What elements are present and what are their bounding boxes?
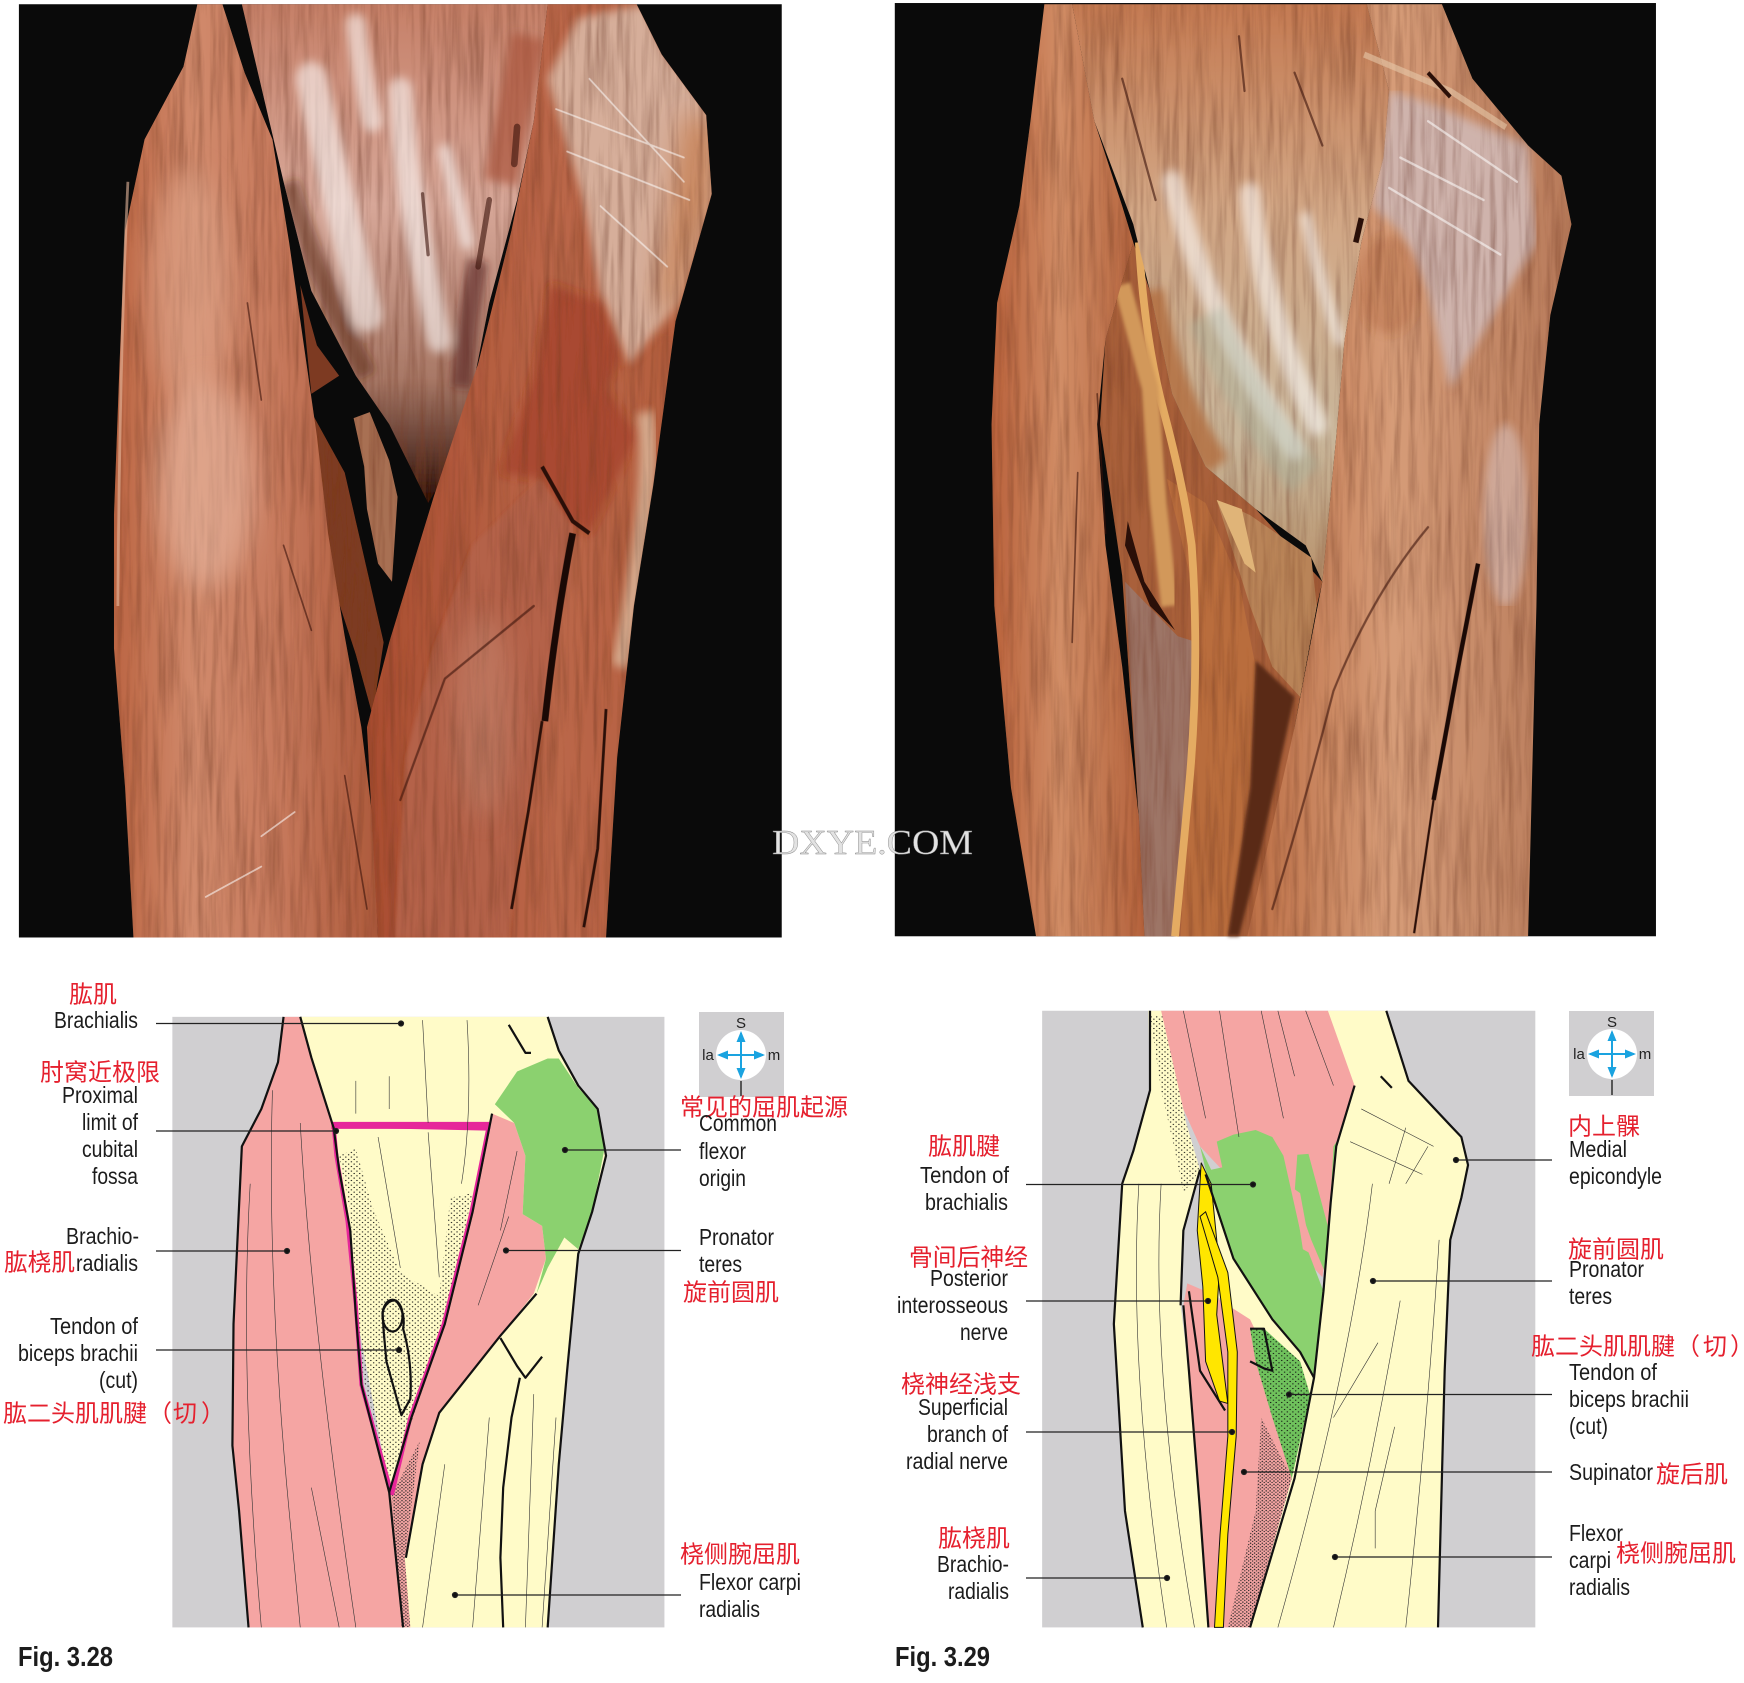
label: common flexor origin	[680, 1094, 848, 1191]
figure caption 3.29: Fig. 3.29	[895, 1641, 990, 1672]
label: flexor carpi radialis: radialis	[1569, 1574, 1630, 1600]
lateral light band	[620, 412, 648, 667]
muscle shade below tendon	[1358, 236, 1420, 333]
fibre lines	[1136, 1011, 1439, 1627]
label: medial epicondyle: epicondyle	[1569, 1163, 1662, 1189]
cream flexor mass	[1250, 1011, 1468, 1627]
yellow posterior interosseous nerve	[1197, 1163, 1228, 1403]
photo: Fig. 3.28 dissection	[19, 4, 782, 937]
compass: Fig. 3.28: m	[768, 1047, 780, 1064]
label: tendon of brachialis: brachialis	[925, 1189, 1008, 1215]
compass: Fig. 3.28: la	[702, 1047, 714, 1064]
pink slit	[1293, 1188, 1311, 1254]
label: brachialis	[54, 982, 138, 1033]
muscle: flexor carpi radialis	[395, 479, 573, 937]
label: pronator teres: Pronator	[1569, 1256, 1644, 1282]
label: common flexor origin: Common	[699, 1110, 777, 1136]
soft overlays clipped to flexor mass	[395, 4, 717, 937]
muscle: forearm fascia piece	[1125, 582, 1197, 936]
label: medial epicondyle: 内上髁	[1568, 1114, 1640, 1140]
label: posterior interosseous nerve: 骨间后神经	[909, 1244, 1028, 1272]
compass: Fig. 3.29	[1569, 1011, 1654, 1096]
label: tendon of brachialis: 肱肌腱	[928, 1134, 1000, 1160]
soft overlays clipped to flexor mass	[1358, 91, 1536, 606]
label: tendon of biceps brachii: （	[1676, 1334, 1700, 1360]
tendon: common flexor origin	[1372, 91, 1536, 388]
photo: Fig. 3.29 dissection	[895, 3, 1656, 936]
outlines	[1114, 1011, 1468, 1627]
label: tendon of biceps brachii: (cut)	[99, 1367, 138, 1393]
label: flexor carpi radialis: 桡侧腕屈肌	[680, 1542, 800, 1568]
muscle: supinator	[1167, 479, 1256, 936]
biceps tendon oval tip	[383, 1300, 403, 1331]
label: brachioradialis	[937, 1526, 1010, 1604]
label: medial epicondyle: Medial	[1569, 1136, 1627, 1162]
cream brachioradialis	[1114, 1011, 1208, 1627]
label: superficial branch of radial nerve	[901, 1372, 1021, 1474]
label: superficial branch of radial nerve: Superficial	[918, 1394, 1008, 1420]
label: pronator teres: teres	[699, 1251, 742, 1277]
muscle: common flexor mass and forearm flexors	[367, 4, 712, 937]
label: pronator teres: Pronator	[699, 1224, 774, 1250]
labels: Fig. 3.28 right column	[680, 1094, 848, 1622]
stippling	[339, 1149, 473, 1478]
outlines	[232, 1017, 606, 1627]
leader lines: Fig. 3.29	[1026, 1158, 1552, 1580]
highlights on brachioradialis	[118, 170, 367, 909]
label: tendon of biceps brachii: (cut)	[1569, 1413, 1608, 1439]
label: flexor carpi radialis	[1569, 1520, 1736, 1600]
label: tendon of biceps brachii: Tendon of	[50, 1313, 139, 1339]
muscle: brachioradialis	[992, 4, 1144, 936]
magenta cubital fossa triangle	[331, 1125, 489, 1495]
green tendon of brachialis	[1200, 1130, 1323, 1378]
compass: Fig. 3.29: la	[1573, 1046, 1585, 1063]
green common flexor origin	[495, 1058, 605, 1294]
label: proximal limit of cubital fossa: limit of	[82, 1109, 139, 1135]
label: proximal limit of cubital fossa: Proximal	[62, 1082, 138, 1108]
stippled wedge	[392, 1441, 420, 1627]
label: brachioradialis: radialis	[76, 1250, 138, 1276]
muscle: flexor mass	[1247, 4, 1571, 936]
dark shadow beside supinator	[1228, 661, 1295, 936]
label: tendon of biceps brachii: 肱二头肌肌腱	[3, 1400, 147, 1428]
stippled supinator shade	[1228, 1418, 1292, 1627]
label: proximal limit of cubital fossa: fossa	[92, 1163, 138, 1189]
pink biceps muscle	[1161, 1011, 1357, 1277]
compass: Fig. 3.29: S	[1607, 1014, 1617, 1031]
label: supinator: Supinator	[1569, 1459, 1653, 1485]
biceps tendon stipple	[1250, 1329, 1311, 1478]
nerve: radial superficial branch	[1139, 242, 1195, 936]
cut tendon of biceps	[383, 1301, 411, 1415]
label: common flexor origin: flexor	[699, 1138, 746, 1164]
lighter orange margin	[656, 115, 717, 315]
label: proximal limit of cubital fossa: cubital	[82, 1136, 138, 1162]
label: proximal limit of cubital fossa: 肘窝近极限	[40, 1060, 160, 1086]
compass: Fig. 3.28	[699, 1012, 784, 1097]
highlights: white tendon fibres	[289, 24, 528, 388]
highlight and crease details	[400, 79, 689, 927]
label: flexor carpi radialis: 桡侧腕屈肌	[1616, 1540, 1736, 1568]
label: pronator teres: 旋前圆肌	[683, 1280, 779, 1306]
deep compartment	[1100, 242, 1322, 936]
label: posterior interosseous nerve: nerve	[960, 1319, 1008, 1345]
label: brachialis: Brachialis	[54, 1007, 138, 1033]
label: brachialis: 肱肌	[69, 982, 117, 1008]
label: flexor carpi radialis	[680, 1542, 801, 1622]
diagram: Fig. 3.28 line drawing	[172, 1017, 664, 1627]
label: brachioradialis: Brachio-	[937, 1551, 1009, 1577]
cream mid region	[1200, 1160, 1314, 1478]
label: tendon of biceps brachii: 切	[173, 1400, 197, 1428]
label: flexor carpi radialis: carpi	[1569, 1547, 1611, 1573]
muscle: pronator teres belly	[500, 285, 637, 533]
label: posterior interosseous nerve	[897, 1244, 1028, 1345]
label: superficial branch of radial nerve: radial nerve	[906, 1448, 1008, 1474]
label: flexor carpi radialis: radialis	[699, 1596, 760, 1622]
label: pronator teres: 旋前圆肌	[1568, 1236, 1664, 1264]
muscle: biceps with tendon	[1072, 4, 1389, 582]
label: tendon of biceps brachii: biceps brachii	[18, 1340, 138, 1366]
label: posterior interosseous nerve: interosseous	[897, 1292, 1008, 1318]
compass: Fig. 3.29: m	[1639, 1046, 1651, 1063]
stippled edge	[1150, 1015, 1200, 1193]
tendon streaks	[1122, 36, 1339, 479]
green biceps tendon	[1250, 1329, 1311, 1478]
label: tendon of biceps brachii: （	[148, 1400, 172, 1428]
figure caption 3.28: Fig. 3.28	[18, 1641, 113, 1672]
label: brachioradialis: 肱桡肌	[938, 1526, 1010, 1552]
label: tendon of biceps brachii: Tendon of	[1569, 1359, 1658, 1385]
green tendon strip	[1295, 1154, 1329, 1273]
tendon strip	[1217, 500, 1256, 573]
label: tendon of biceps brachii: ）	[201, 1400, 225, 1428]
label: pronator teres: teres	[1569, 1283, 1612, 1309]
labels: Fig. 3.28 left column	[3, 982, 225, 1428]
deep structures in the cubital fossa	[300, 285, 398, 715]
light band	[1484, 424, 1528, 606]
label: superficial branch of radial nerve: 桡神经浅支	[901, 1372, 1021, 1398]
grey background	[172, 1017, 664, 1627]
label: tendon of biceps brachii	[3, 1313, 225, 1428]
gap shadow	[1125, 521, 1175, 630]
label: tendon of biceps brachii: 肱二头肌肌腱	[1531, 1334, 1675, 1360]
label: brachioradialis	[4, 1223, 139, 1276]
muscle: brachioradialis	[114, 4, 378, 937]
label: tendon of brachialis	[920, 1134, 1010, 1215]
fibre lines	[246, 1020, 556, 1627]
tendon: biceps cut end	[1217, 500, 1317, 697]
green strip right	[1331, 1119, 1351, 1198]
pink brachioradialis	[232, 1017, 403, 1627]
label: flexor carpi radialis: Flexor carpi	[699, 1569, 801, 1595]
label: brachioradialis: Brachio-	[66, 1223, 139, 1249]
label: flexor carpi radialis: Flexor	[1569, 1520, 1623, 1546]
label: medial epicondyle	[1568, 1114, 1662, 1189]
muscle: central biceps tendon area	[242, 4, 548, 503]
labels: Fig. 3.29 left column	[897, 1134, 1028, 1604]
surface details	[1072, 55, 1517, 933]
nerve: posterior interosseous	[1122, 285, 1169, 606]
label: superficial branch of radial nerve: branch of	[927, 1421, 1009, 1447]
diagram: Fig. 3.29 line drawing	[1042, 1011, 1535, 1627]
grey background	[1042, 1011, 1535, 1627]
compass: Fig. 3.28: S	[736, 1015, 746, 1032]
pink supinator	[1183, 1283, 1292, 1627]
tendon: common flexor origin	[548, 4, 717, 364]
cream muscle region	[300, 1017, 606, 1627]
label: posterior interosseous nerve: Posterior	[930, 1265, 1008, 1291]
label: pronator teres	[683, 1224, 779, 1306]
label: tendon of biceps brachii	[1531, 1334, 1744, 1439]
label: supinator	[1569, 1459, 1728, 1488]
yellow superficial radial nerve	[1200, 1212, 1237, 1627]
label: pronator teres	[1568, 1236, 1664, 1309]
label: proximal limit of cubital fossa	[40, 1060, 160, 1189]
label: brachioradialis: 肱桡肌	[4, 1250, 75, 1276]
watermark: DXYE.COM	[772, 823, 973, 862]
labels: Fig. 3.29 right column	[1531, 1114, 1744, 1600]
label: tendon of biceps brachii: 切	[1703, 1334, 1727, 1360]
label: supinator: 旋后肌	[1656, 1462, 1728, 1488]
label: tendon of brachialis: Tendon of	[920, 1162, 1010, 1188]
label: tendon of biceps brachii: biceps brachii	[1569, 1386, 1689, 1412]
pink pronator teres	[389, 1114, 546, 1627]
label: common flexor origin: 常见的屈肌起源	[680, 1094, 848, 1122]
leader lines: Fig. 3.28	[156, 1021, 681, 1598]
label: brachioradialis: radialis	[948, 1578, 1009, 1604]
label: common flexor origin: origin	[699, 1165, 746, 1191]
